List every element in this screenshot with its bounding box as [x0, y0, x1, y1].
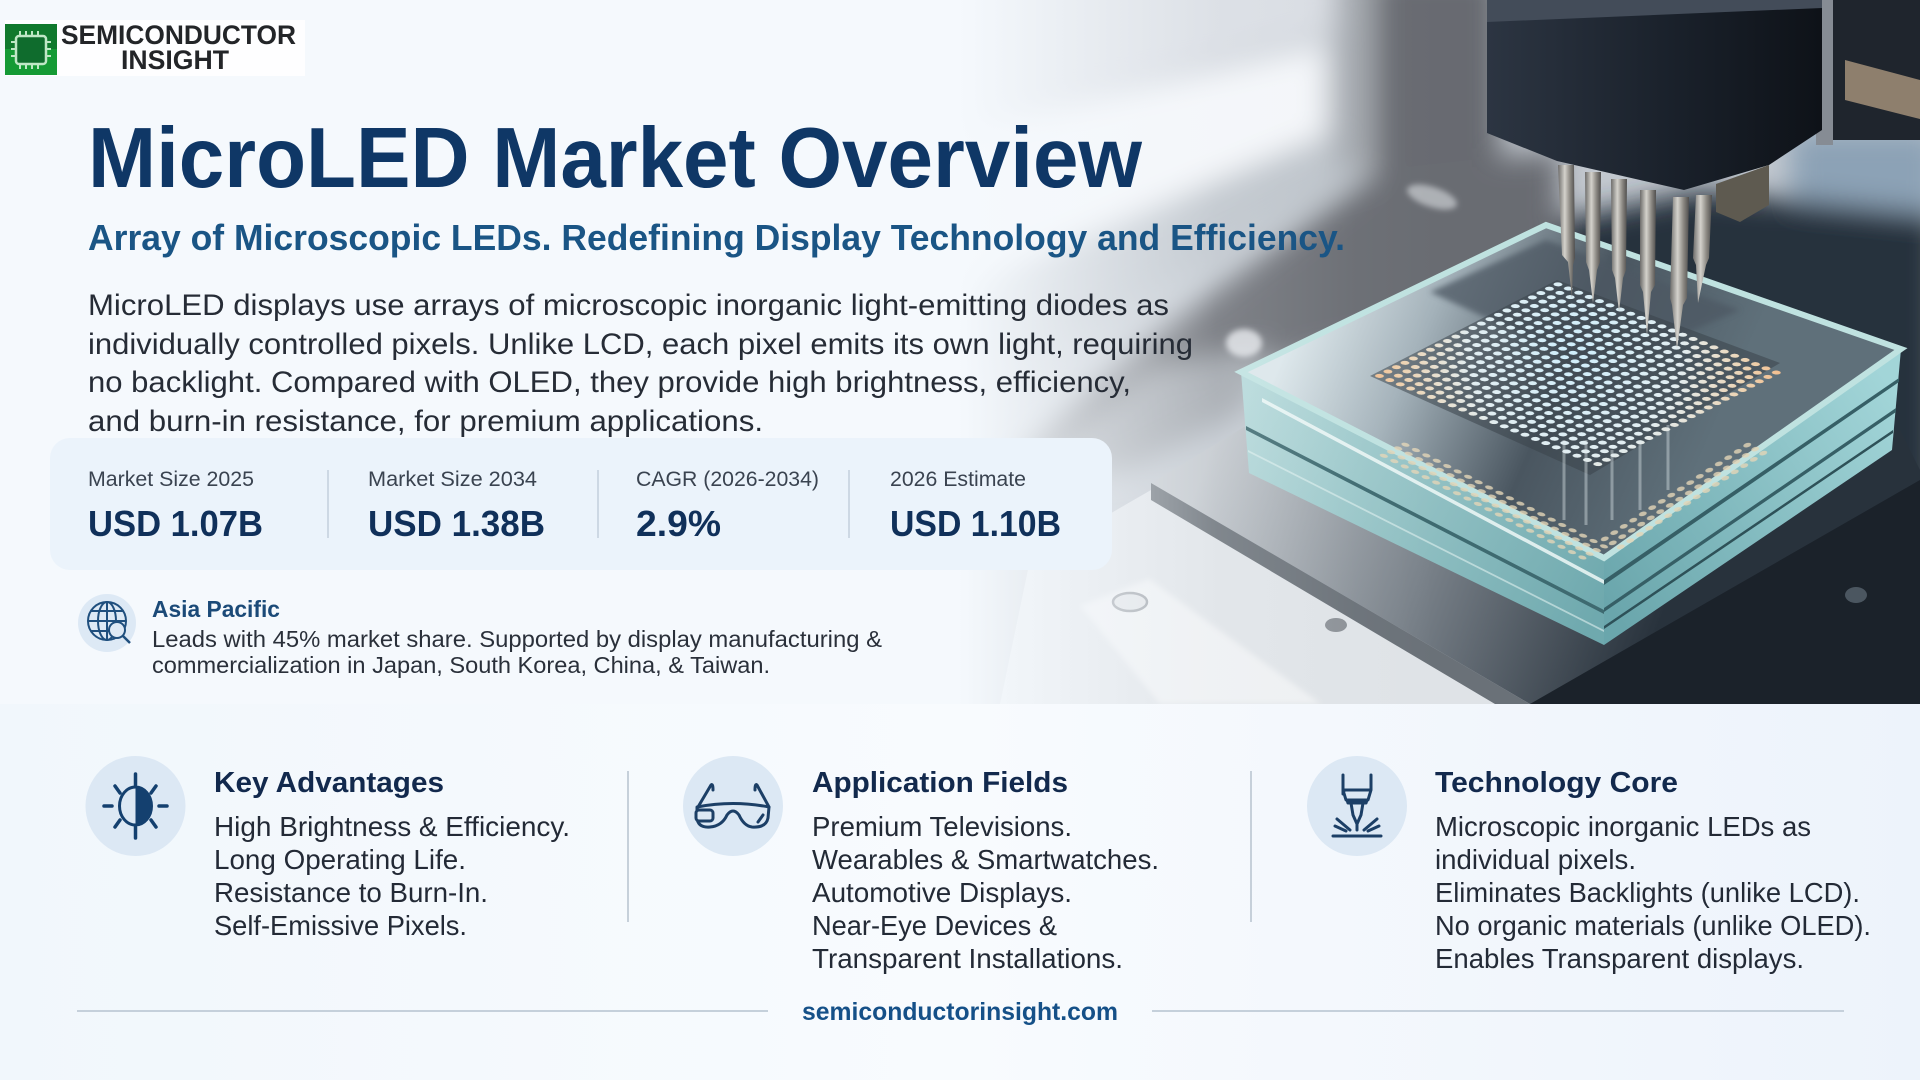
stat: market size 2025: USD 1.07B — [88, 503, 263, 544]
list: Self-Emissive Pixels. — [214, 910, 467, 941]
list: High Brightness & Efficiency. — [214, 811, 570, 842]
stat: market size 2025: Market Size 2025 — [88, 468, 254, 491]
glass substrate stack — [1241, 225, 1901, 645]
panel: key advantages — [86, 756, 570, 941]
icon: smart glasses — [683, 756, 783, 856]
intro paragraph: no backlight. Compared with OLED, they provide high brightness, efficiency, — [88, 366, 1131, 399]
metal base plate — [1000, 427, 1920, 704]
list: Microscopic inorganic LEDs as — [1435, 811, 1811, 842]
stat: 2026 estimate — [890, 468, 1061, 544]
region text: Asia Pacific — [152, 596, 280, 622]
stat: market size 2025 — [88, 468, 263, 544]
icon: half sun — [86, 756, 186, 856]
callout: Asia Pacific — [78, 594, 882, 678]
stat: market size 2034: USD 1.38B — [368, 503, 545, 544]
stat: 2026 estimate: USD 1.10B — [890, 503, 1061, 544]
list: Wearables & Smartwatches. — [812, 844, 1159, 875]
stat: market size 2034: Market Size 2034 — [368, 468, 537, 491]
LED dot array — [1374, 282, 1781, 560]
region text: Leads with 45% market share. Supported by display manufacturing & — [152, 626, 882, 652]
list: Premium Televisions. — [812, 811, 1072, 842]
icon: green chip — [5, 24, 57, 75]
intro paragraph: MicroLED displays use arrays of microscopic inorganic light-emitting diodes as — [88, 289, 1169, 322]
list: Eliminates Backlights (unlike LCD). — [1435, 877, 1860, 908]
list — [812, 811, 1159, 974]
footer website: semiconductorinsight.com — [802, 998, 1118, 1026]
list: Automotive Displays. — [812, 877, 1072, 908]
icon: globe with magnifier — [78, 594, 136, 652]
icon: nozzle emitting light — [1307, 756, 1407, 856]
list — [214, 811, 570, 941]
stat: 2026 estimate: 2026 Estimate — [890, 468, 1026, 491]
list — [1435, 811, 1871, 974]
logo text: INSIGHT — [121, 45, 229, 75]
list: Enables Transparent displays. — [1435, 943, 1804, 974]
bottom panel background — [0, 704, 1920, 1080]
list: Long Operating Life. — [214, 844, 466, 875]
heading: Key Advantages — [214, 767, 444, 799]
list: Transparent Installations. — [812, 943, 1123, 974]
logo text: SEMICONDUCTOR — [61, 20, 296, 50]
stat: CAGR — [636, 468, 819, 544]
region text — [152, 596, 882, 678]
panel: application fields — [683, 756, 1159, 974]
stat: CAGR: 2.9% — [636, 503, 721, 544]
machine head — [1487, 0, 1920, 222]
intro paragraph: individually controlled pixels. Unlike LCD, each pixel emits its own light, requiring — [88, 328, 1193, 361]
probe needles — [1558, 165, 1712, 349]
intro paragraph: and burn-in resistance, for premium applications. — [88, 405, 763, 438]
subtitle: Array of Microscopic LEDs. Redefining Display Technology and Efficiency. — [88, 217, 1345, 258]
region text: commercialization in Japan, South Korea, China, & Taiwan. — [152, 652, 770, 678]
stat: market size 2034 — [368, 468, 545, 544]
logo — [5, 20, 305, 76]
list: Near-Eye Devices & — [812, 910, 1057, 941]
list: Resistance to Burn-In. — [214, 877, 488, 908]
title: MicroLED Market Overview — [88, 111, 1143, 206]
list: individual pixels. — [1435, 844, 1636, 875]
logo text — [61, 20, 296, 75]
intro paragraph — [88, 289, 1193, 438]
hero photo: microLED array under probe needles — [991, 0, 1920, 704]
light reflections in background — [1226, 179, 1460, 357]
heading: Application Fields — [812, 767, 1068, 799]
panel: technology core — [1307, 756, 1871, 974]
panel: market stats — [50, 438, 1112, 570]
list: No organic materials (unlike OLED). — [1435, 910, 1871, 941]
heading: Technology Core — [1435, 767, 1678, 799]
stat: CAGR: CAGR (2026-2034) — [636, 468, 819, 491]
